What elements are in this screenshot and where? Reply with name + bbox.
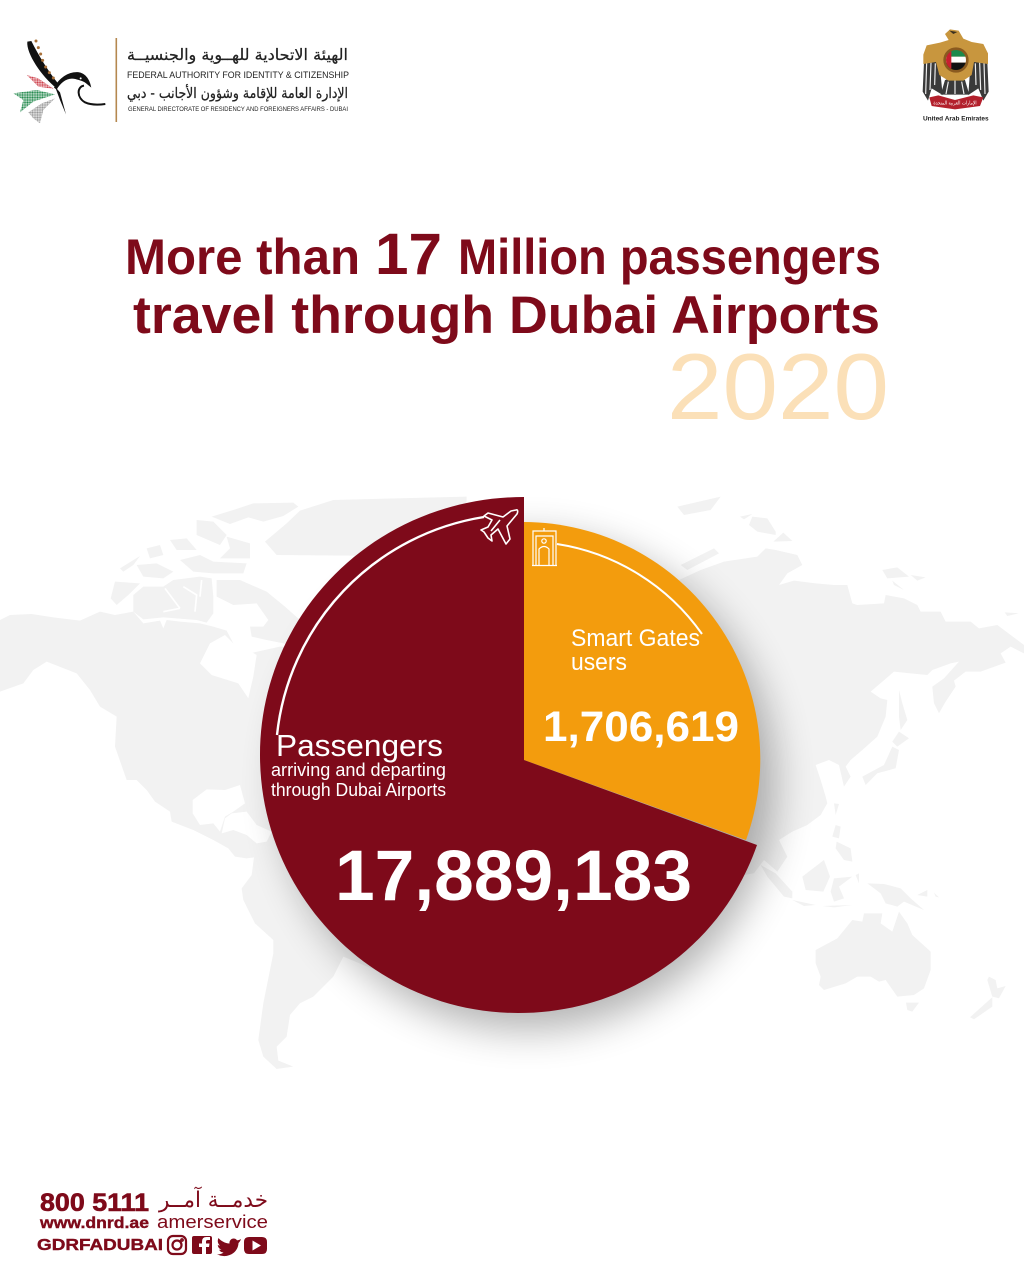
logo text [127,46,349,113]
Greenland [265,497,467,557]
Southeast Asia, Australia and New Zealand [761,803,1006,1019]
icon: twitter [217,1238,241,1256]
logo text: GENERAL DIRECTORATE OF RESIDENCY AND FOREIGNERS AFFAIRS - DUBAI [128,106,348,113]
icon: youtube [244,1237,267,1254]
label: passengers: through Dubai Airports [271,780,446,800]
footer contact block [37,1186,268,1256]
value: smart gates: 1,706,619 [543,703,739,751]
phone number: 800 5111 [40,1189,149,1217]
slice: passengers [260,497,757,1013]
Ellesmere island [212,503,298,524]
arc line: smart gates [557,544,702,634]
slice: smart gates [524,522,760,840]
icon: airplane [481,510,518,544]
logo text: الهيئة الاتحادية للهــوية والجنسيــة [127,46,348,65]
label: passengers: arriving and departing [271,760,446,780]
amer service arabic: خدمــة آمــر [158,1186,268,1213]
icon: instagram [168,1236,186,1254]
title: 17 [375,222,442,287]
icon: falcon emblem [13,39,105,123]
icon: UAE emblem: United Arab Emirates [923,115,989,122]
title: travel through Dubai Airports [133,286,880,345]
icon: UAE emblem [923,29,989,122]
amerservice: amerservice [157,1212,268,1232]
pie chart [260,497,775,1030]
label: passengers [271,728,446,800]
label: passengers: Passengers [276,728,443,763]
world map background [0,497,1024,1069]
arc line: passengers [277,517,484,735]
icon: smart gate [532,528,557,566]
Central and South America [137,780,400,1069]
title: Million passengers [458,229,881,285]
title: More than [125,229,360,285]
social handle: GDRFADUBAI [37,1237,163,1254]
label: smart gates: Smart Gates [571,625,700,652]
North America [0,497,467,780]
year 2020: 2020 [667,334,889,439]
divider [116,38,117,122]
pie shadow [281,536,775,1030]
label: smart gates: users [571,649,627,676]
icon: UAE emblem: الإمارات العربية المتحدة [933,101,977,107]
Eurasia [657,497,1024,890]
header logo: federal authority [13,38,349,123]
website: www.dnrd.ae [39,1215,149,1232]
label: smart gates [571,625,700,676]
value: passengers: 17,889,183 [335,837,692,916]
title [125,222,881,345]
icon: facebook [192,1236,212,1254]
logo text: FEDERAL AUTHORITY FOR IDENTITY & CITIZENSHIP [127,70,349,81]
logo text: الإدارة العامة للإقامة وشؤون الأجانب - دبي [127,84,348,102]
